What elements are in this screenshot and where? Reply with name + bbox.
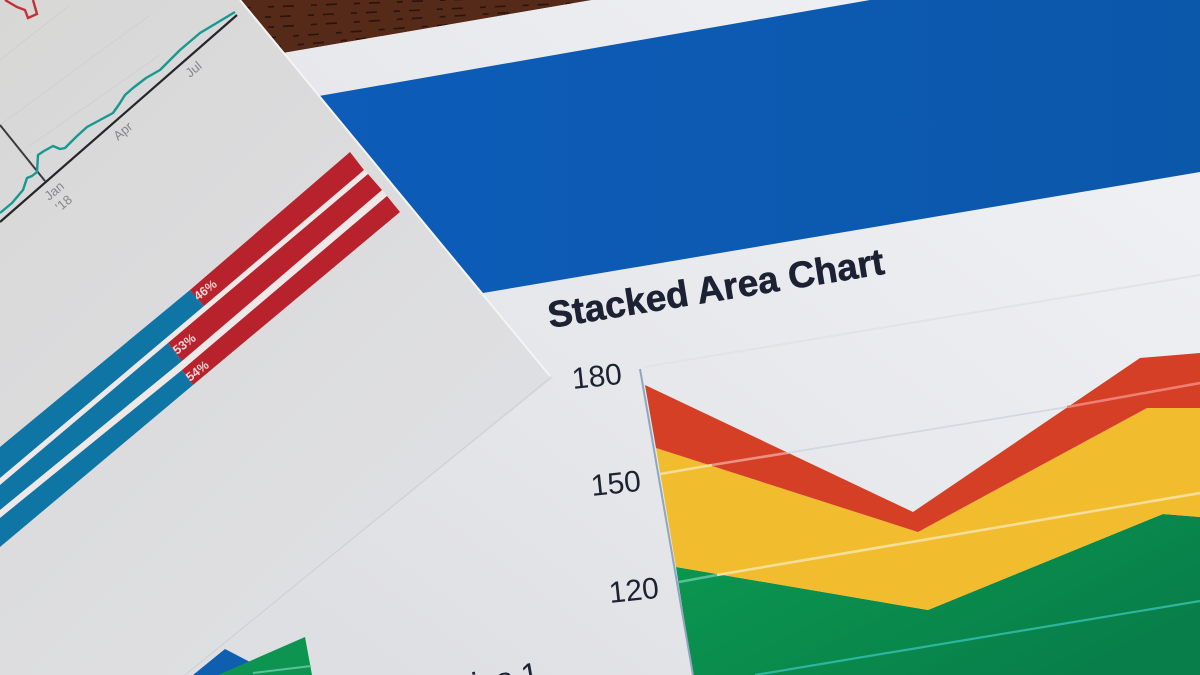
teal data line	[0, 12, 235, 213]
bar 1	[0, 152, 364, 478]
axis month labels	[41, 58, 205, 214]
axis month labels: '18	[52, 192, 75, 214]
area: green series	[676, 514, 1200, 675]
y axis labels: 120	[607, 572, 661, 610]
axis month labels: Jul	[182, 58, 205, 80]
y axis line	[640, 369, 693, 675]
panel: front sheet with line chart and bars	[0, 0, 553, 675]
stacked areas chart	[645, 353, 1200, 675]
axis month labels: Jan	[41, 178, 67, 203]
bar 2: 53%	[170, 331, 199, 357]
bar 3	[0, 196, 400, 547]
heading: Stacked Area Chart: Stacked Area Chart	[545, 241, 887, 336]
blue header band	[319, 0, 1200, 293]
y axis labels: 150	[589, 465, 643, 503]
bar chart	[0, 152, 400, 547]
axis lines	[0, 15, 237, 222]
red data line	[5, 0, 37, 18]
line chart	[0, 0, 237, 222]
area: red series	[645, 353, 1200, 532]
y axis labels	[570, 358, 661, 610]
bar 1: 46%	[191, 277, 220, 303]
y axis labels: 180	[570, 358, 624, 396]
axis month labels: Apr	[110, 118, 136, 143]
wood table	[240, 0, 600, 53]
area: yellow series	[656, 408, 1200, 610]
bar 3: 54%	[183, 358, 212, 384]
top gridline	[645, 275, 1200, 367]
mini chart: green area	[218, 637, 312, 675]
gridlines over the areas	[660, 383, 1200, 675]
bar 2	[0, 174, 382, 510]
mini chart: blue area	[193, 649, 250, 675]
